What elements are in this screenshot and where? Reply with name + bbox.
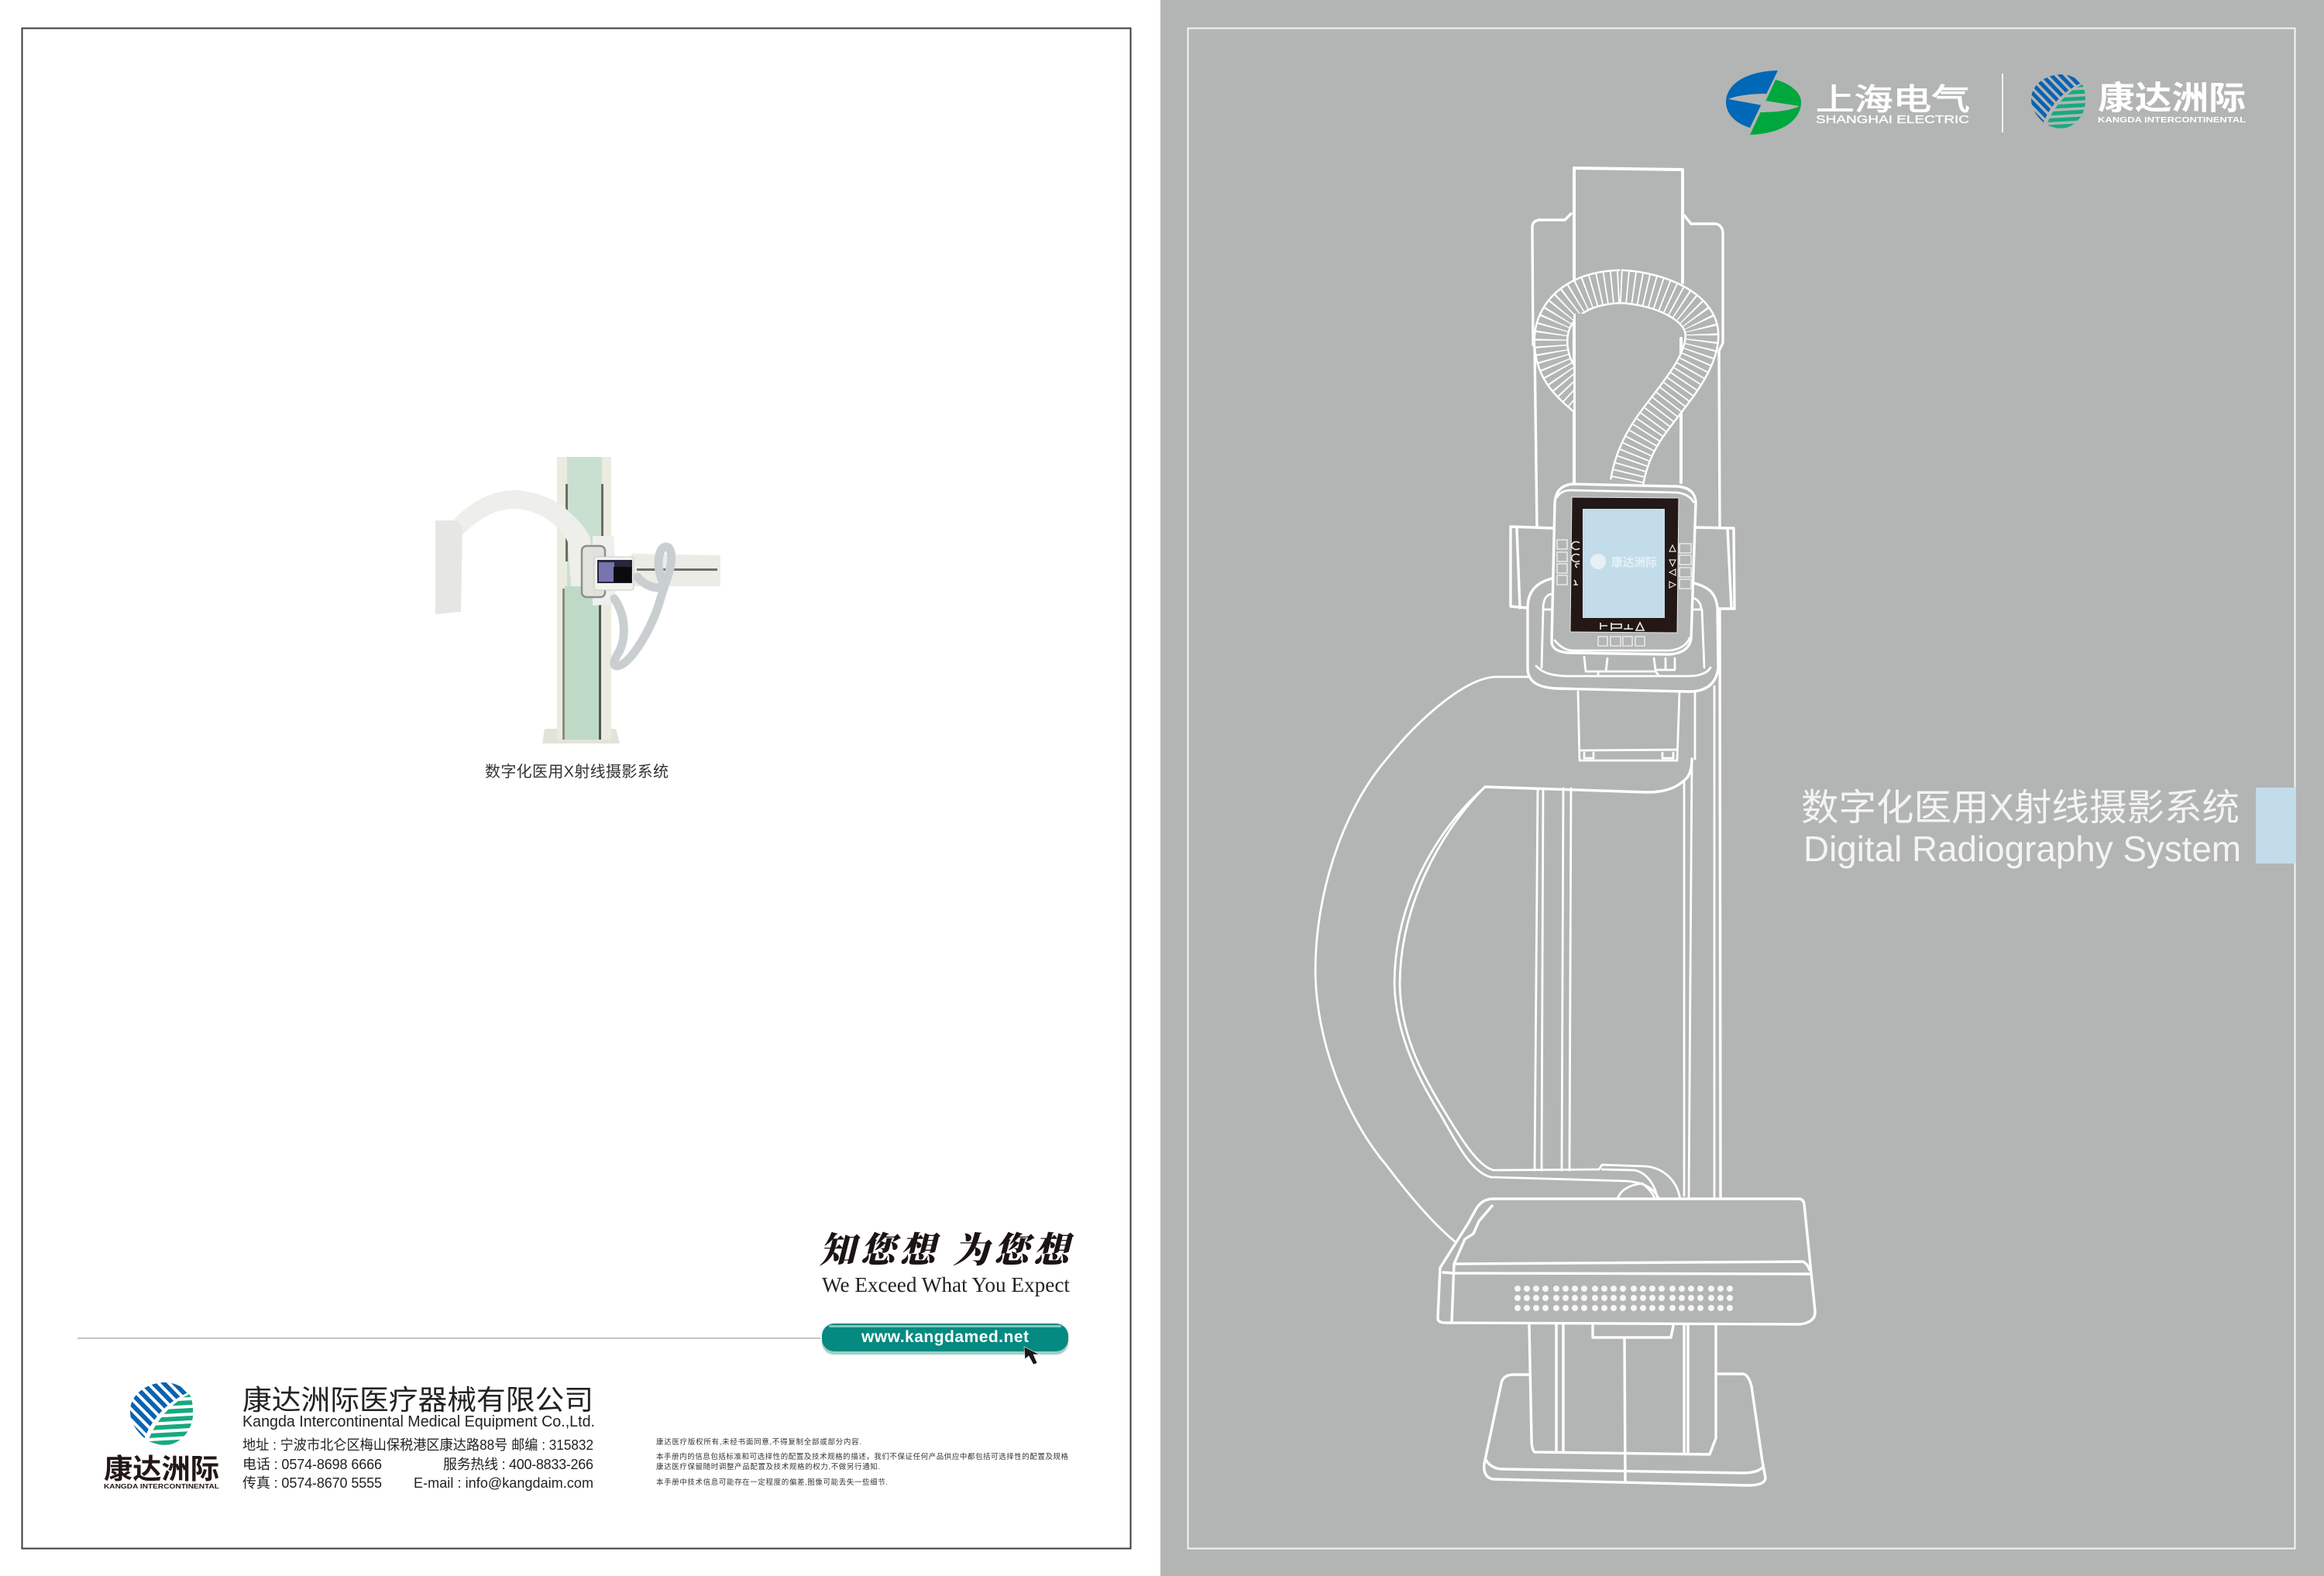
logo wordmark: 康达洲际 <box>104 1453 219 1485</box>
table top <box>1438 1199 1815 1324</box>
screen <box>1583 509 1665 618</box>
handle inner detail <box>1536 594 1710 676</box>
company name english: Kangda Intercontinental Medical Equipment Co.,Ltd. <box>242 1413 595 1430</box>
company logo <box>104 1366 219 1490</box>
panel: back cover <box>0 0 1160 1576</box>
address: 地址 : 宁波市北仑区梅山保税港区康达路88号 邮编 : 315832 <box>242 1437 593 1453</box>
website button <box>820 1322 1070 1365</box>
table details <box>1443 1206 1810 1323</box>
product caption: 数字化医用X射线摄影系统 <box>485 763 669 781</box>
c-arm inner curve a <box>1394 787 1659 1200</box>
back cover frame <box>22 28 1131 1549</box>
divider rule <box>77 1337 821 1339</box>
c-arm outer edge <box>1315 677 1528 1242</box>
logo divider <box>2002 74 2003 132</box>
hotline: 服务热线 : 400-8833-266 <box>443 1457 593 1472</box>
hose <box>614 547 672 666</box>
panel bottom icons <box>1600 623 1644 630</box>
accent block <box>2256 788 2295 864</box>
phone: 电话 : 0574-8698 6666 <box>242 1457 382 1472</box>
slogan calligraphy: 知您想 为您想 <box>819 1222 1074 1273</box>
screen watermark logo: 康达洲际 <box>1611 555 1657 569</box>
column <box>557 457 611 740</box>
panel left icons <box>1572 542 1580 585</box>
panel right icons <box>1669 545 1676 588</box>
base plate <box>1484 1374 1765 1485</box>
c-arm inner edge top <box>1485 759 1692 792</box>
control panel <box>594 557 634 590</box>
icon: cursor <box>1024 1347 1040 1365</box>
screen watermark logo <box>1590 554 1657 569</box>
kangda subtitle: KANGDA INTERCONTINENTAL <box>2098 115 2247 125</box>
corrugated hose <box>1551 287 1702 482</box>
control panel body <box>1552 484 1696 654</box>
handle bar <box>1528 579 1718 692</box>
legal fine print: 本手册中技术信息可能存在一定程度的偏差,图像可能丢失一些细节. <box>656 1478 888 1487</box>
lower pivot <box>1599 1165 1680 1200</box>
long vertical rails <box>1535 686 1714 1200</box>
line drawing: radiography unit <box>1315 168 1815 1485</box>
fax: 传真 : 0574-8670 5555 <box>242 1475 382 1491</box>
column bracket left <box>1532 214 1571 527</box>
legal fine print: 康达医疗版权所有,未经书面同意,不得复制全部或部分内容. <box>656 1437 861 1447</box>
shanghai electric logo <box>1726 70 1970 135</box>
icon: globe mark <box>2022 60 2085 133</box>
horizontal arm <box>631 554 720 586</box>
website url: www.kangdamed.net <box>861 1328 1029 1346</box>
legal fine print: 本手册内的信息包括标准和可选择性的配置及技术规格的描述，我们不保证任何产品供应中都包括可选择性的配置及规格 <box>656 1452 1068 1461</box>
base plate <box>542 729 620 743</box>
product photo: digital radiography unit <box>435 457 720 743</box>
panel screen <box>597 560 632 583</box>
outer rail <box>1720 609 1721 1200</box>
panel: front cover <box>1160 0 2324 1576</box>
company name chinese: 康达洲际医疗器械有限公司 <box>242 1384 593 1416</box>
c-arm inner curve b <box>1400 787 1599 1170</box>
email: E-mail : info@kangdaim.com <box>414 1475 593 1491</box>
C-arm arch <box>453 490 592 586</box>
legal fine print: 康达医疗保留随时调整产品配置及技术规格的权力,不做另行通知. <box>656 1462 880 1471</box>
kangda wordmark: 康达洲际 <box>2098 80 2246 116</box>
front cover frame <box>1188 28 2295 1549</box>
panel inner contour <box>1555 490 1693 651</box>
kangda logo <box>2022 60 2247 133</box>
handle <box>582 546 605 597</box>
legal fine print <box>656 1437 1068 1487</box>
table speaker dots <box>1518 1289 1732 1308</box>
shanghai electric subtitle: SHANGHAI ELECTRIC <box>1816 113 1969 126</box>
cover title chinese: 数字化医用X射线摄影系统 <box>1801 788 2240 829</box>
company contact block <box>242 1384 595 1491</box>
carriage <box>593 536 615 606</box>
panel buttons <box>1557 540 1691 646</box>
logo subtitle: KANGDA INTERCONTINENTAL <box>104 1483 219 1490</box>
icon: globe mark <box>119 1366 193 1451</box>
column bracket right <box>1684 215 1723 527</box>
icon: shanghai electric mark <box>1726 70 1801 135</box>
screen bezel <box>1570 497 1679 633</box>
slogan english: We Exceed What You Expect <box>822 1273 1070 1296</box>
lower stand <box>1529 1324 1716 1482</box>
shanghai electric wordmark: 上海电气 <box>1816 84 1970 117</box>
x-ray tube box <box>1578 692 1679 761</box>
cover title english: Digital Radiography System <box>1803 829 2241 869</box>
side plates <box>1511 527 1734 609</box>
upper column <box>1574 168 1683 482</box>
slot <box>637 568 717 571</box>
detector box <box>435 520 462 614</box>
